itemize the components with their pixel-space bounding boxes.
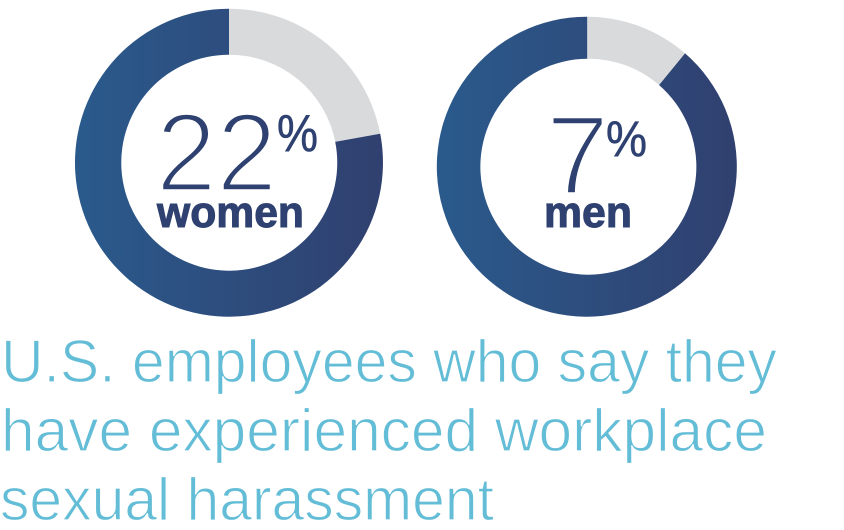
caption text bbox=[0, 328, 777, 530]
percent sign: women: % bbox=[277, 105, 318, 163]
caption text: have experienced workplace bbox=[1, 397, 767, 464]
donut segment: women blue share bbox=[75, 9, 383, 317]
label: women: women bbox=[156, 188, 304, 237]
label: men: men bbox=[544, 188, 632, 237]
number: 7: 7 bbox=[546, 93, 609, 218]
donut segment: women grey remainder bbox=[229, 9, 380, 142]
percent sign: men: % bbox=[606, 111, 647, 167]
panel: men donut chart bbox=[437, 17, 737, 317]
panel: women donut chart bbox=[75, 9, 383, 317]
donut segment: men blue share bbox=[437, 17, 737, 317]
caption text: U.S. employees who say they bbox=[1, 328, 777, 395]
number: 22: 22 bbox=[156, 91, 277, 215]
donut segment: men grey remainder bbox=[587, 17, 685, 85]
